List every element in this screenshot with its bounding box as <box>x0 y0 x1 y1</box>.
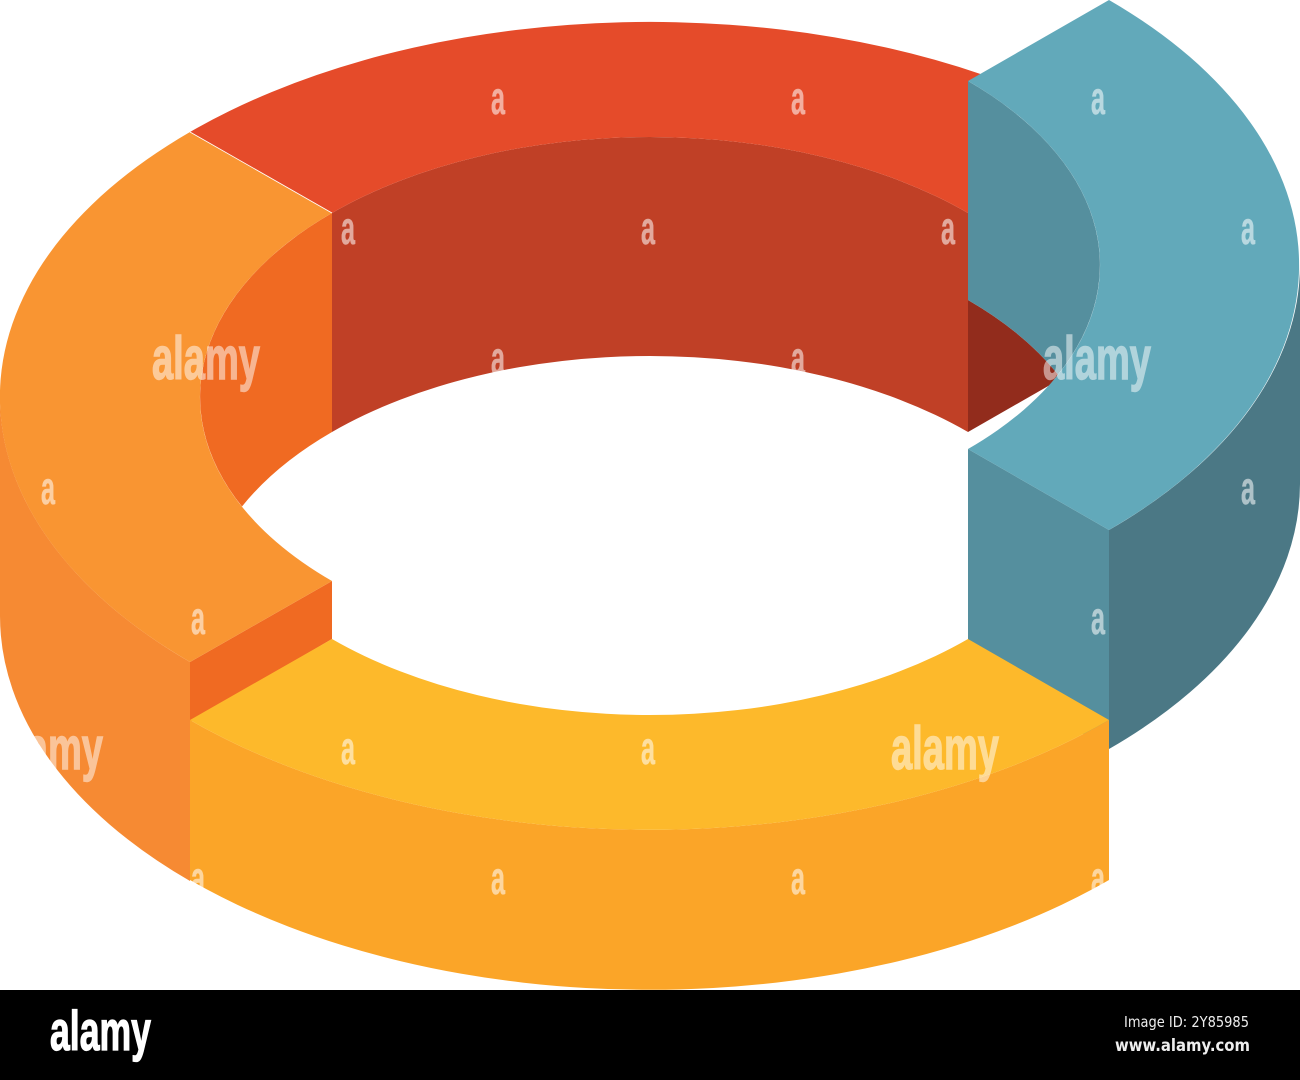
watermark marks: a <box>1091 72 1105 124</box>
watermark marks: a <box>641 722 655 774</box>
watermark marks: a <box>491 332 505 384</box>
yellow segment <box>190 639 1109 990</box>
watermark marks <box>41 72 1255 904</box>
watermark: left: alamy <box>152 325 260 392</box>
watermark marks: a <box>791 852 805 904</box>
orange inner wall <box>200 213 332 506</box>
watermark marks: a <box>1091 852 1105 904</box>
blue top face <box>968 0 1299 530</box>
watermark marks: a <box>341 722 355 774</box>
watermark marks: a <box>1091 592 1105 644</box>
watermark marks: a <box>1241 462 1255 514</box>
watermark: lower right: alamy <box>891 715 999 782</box>
watermark marks: a <box>791 332 805 384</box>
red top face <box>190 22 982 213</box>
watermark marks: a <box>191 852 205 904</box>
image id: Image ID: 2Y85985 <box>1124 1013 1249 1031</box>
orange outer side <box>0 397 190 881</box>
red segment <box>190 22 1058 432</box>
footer bar <box>0 990 1300 1080</box>
watermark marks: a <box>41 462 55 514</box>
blue inner wall <box>968 81 1100 374</box>
footer logo: alamy <box>50 999 151 1062</box>
seam between red and orange <box>190 132 332 213</box>
blue outer side <box>1109 265 1300 749</box>
watermark: right: alamy <box>1043 325 1151 392</box>
watermark marks: a <box>341 202 355 254</box>
yellow top face <box>190 639 1109 830</box>
watermark marks: a <box>491 72 505 124</box>
watermark marks: a <box>641 202 655 254</box>
watermark: lower left: alamy <box>0 715 103 782</box>
watermark marks: a <box>1241 202 1255 254</box>
yellow outer side <box>190 720 1109 990</box>
website: www.alamy.com <box>1115 1036 1250 1055</box>
blue end cap <box>968 449 1109 749</box>
watermark marks: a <box>491 852 505 904</box>
orange segment <box>0 132 332 881</box>
red wall dark wedge <box>968 300 1058 432</box>
red inner wall <box>332 137 968 432</box>
blue segment <box>968 0 1300 749</box>
watermark marks: a <box>941 202 955 254</box>
watermark marks: a <box>791 72 805 124</box>
orange top face <box>0 132 332 662</box>
watermark marks: a <box>191 592 205 644</box>
orange end cap <box>190 581 332 722</box>
